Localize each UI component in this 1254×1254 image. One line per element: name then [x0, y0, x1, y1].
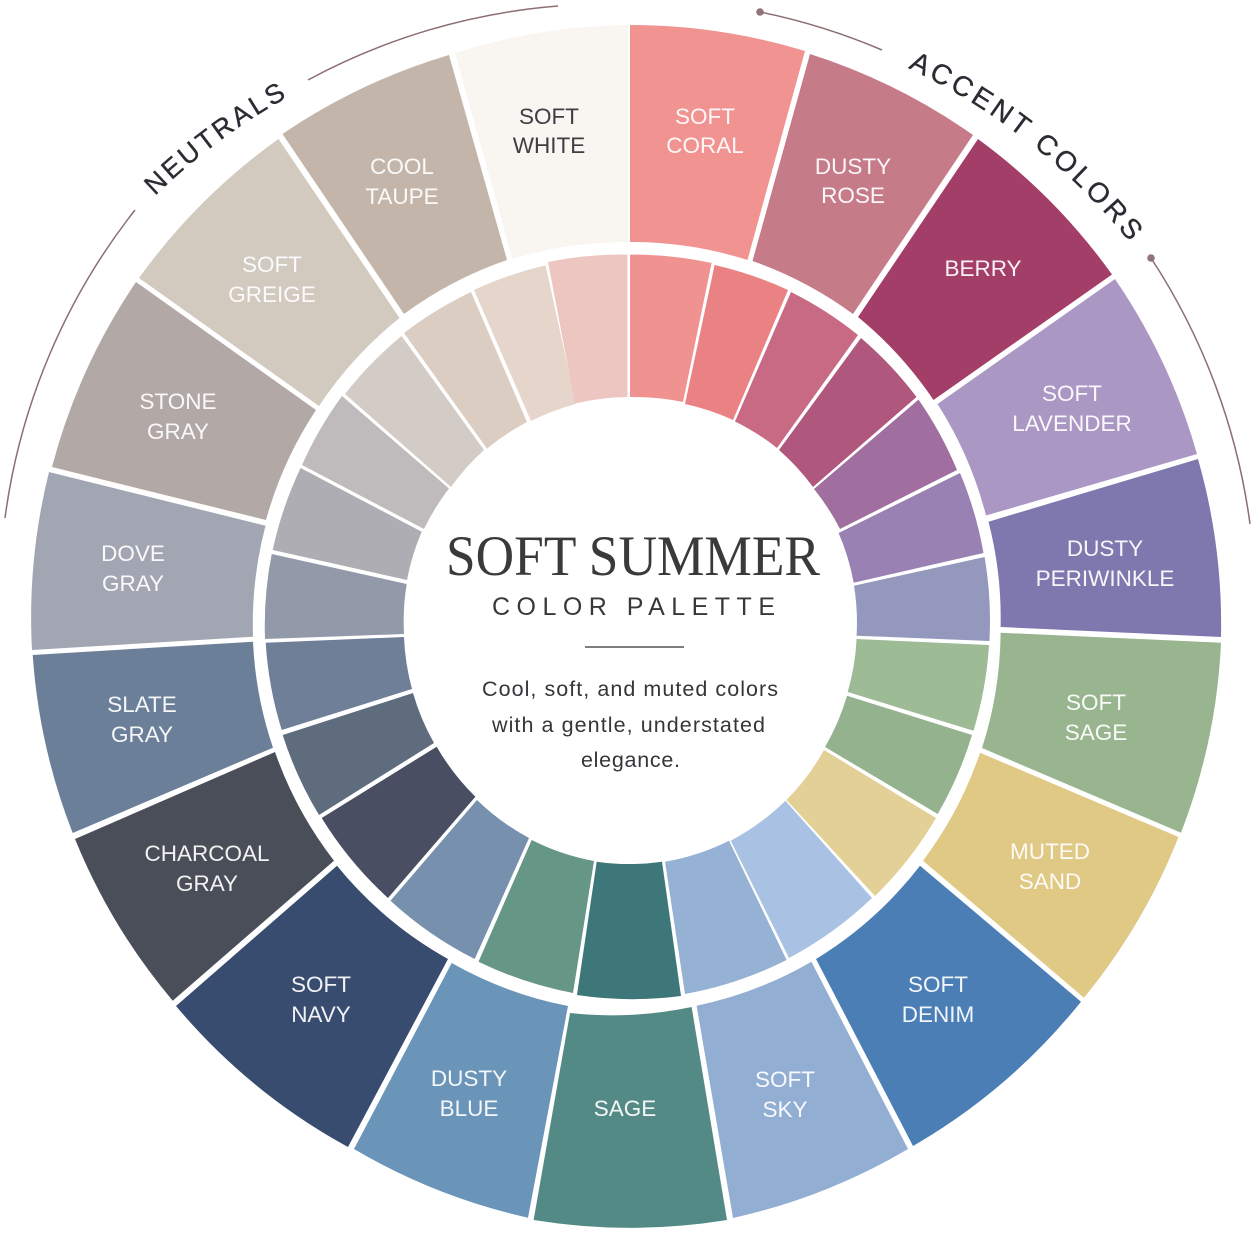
segment: soft white: SOFT [519, 104, 579, 129]
segment: soft denim [816, 866, 1081, 1146]
segment: soft greige: GREIGE [228, 282, 316, 307]
segment: muted sand: SAND [1019, 869, 1081, 894]
segment: soft white [455, 25, 628, 259]
segment: cool taupe: TAUPE [365, 184, 439, 209]
segment: soft denim: SOFT [908, 972, 968, 997]
segment: muted sand [923, 753, 1178, 998]
accent colors arc heading: ACCENT COLORS [908, 54, 1142, 239]
segment: berry: BERRY [944, 256, 1022, 281]
segment: soft navy: SOFT [291, 972, 351, 997]
segment: dusty blue: DUSTY [431, 1066, 507, 1091]
segment: dusty periwinkle [988, 459, 1221, 637]
segment: soft coral [630, 25, 805, 260]
segment: stone gray: STONE [139, 389, 217, 414]
segment: sage: SAGE [594, 1096, 656, 1121]
subtitle: COLOR PALETTE [492, 593, 775, 621]
segment: stone gray: GRAY [147, 419, 209, 444]
segment: soft greige: SOFT [242, 252, 302, 277]
segment: cool taupe: COOL [370, 154, 434, 179]
segment: dusty blue [354, 963, 568, 1218]
segment: soft lavender: LAVENDER [1012, 411, 1132, 436]
segment: soft sage: SAGE [1065, 720, 1127, 745]
segment: muted sand: MUTED [1010, 839, 1090, 864]
segment: soft navy [176, 866, 448, 1147]
inner ring: color swatches [265, 255, 990, 999]
title: SOFT SUMMER [446, 525, 820, 588]
description: elegance. [581, 748, 680, 772]
segment: dove gray: GRAY [102, 571, 164, 596]
accent colors arc heading [756, 8, 1251, 524]
segment: slate gray: SLATE [107, 692, 177, 717]
segment: cool taupe [282, 55, 507, 314]
segment: soft sky: SOFT [755, 1067, 815, 1092]
center title block [446, 525, 820, 772]
description: Cool, soft, and muted colors [482, 677, 778, 701]
segment: soft sky [697, 962, 908, 1218]
segment: dove gray: DOVE [101, 541, 165, 566]
segment: dusty periwinkle: DUSTY [1067, 536, 1143, 561]
segment: soft coral: CORAL [666, 133, 744, 158]
description [482, 677, 778, 772]
segment: dusty blue: BLUE [440, 1096, 498, 1121]
segment: soft lavender: SOFT [1042, 381, 1102, 406]
segment: charcoal gray: CHARCOAL [144, 841, 270, 866]
segment: dusty rose: DUSTY [815, 154, 891, 179]
segment: charcoal gray: GRAY [176, 871, 238, 896]
segment: soft denim: DENIM [902, 1002, 974, 1027]
segment: sage [534, 1007, 727, 1228]
segment: dusty rose: ROSE [821, 183, 885, 208]
segment: slate gray: GRAY [111, 722, 173, 747]
segment: soft navy: NAVY [291, 1002, 351, 1027]
segment: soft sky: SKY [762, 1097, 808, 1122]
segment: soft white: WHITE [513, 133, 585, 158]
segment: stone gray [52, 282, 316, 520]
segment: charcoal gray [75, 752, 334, 1001]
segment: soft lavender [938, 279, 1197, 516]
neutrals arc heading: NEUTRALS [144, 84, 284, 195]
segment: dusty rose [752, 54, 973, 314]
segment: soft sage [982, 633, 1221, 833]
segment: dove gray [31, 472, 265, 650]
segment: soft greige [139, 139, 400, 406]
segment: slate gray [33, 642, 273, 833]
segment: soft sage: SOFT [1066, 690, 1126, 715]
segment: berry [858, 139, 1112, 400]
segment: dusty periwinkle: PERIWINKLE [1036, 566, 1174, 591]
neutrals arc heading [4, 5, 558, 518]
segment: soft coral: SOFT [675, 104, 735, 129]
description: with a gentle, understated [491, 713, 765, 737]
